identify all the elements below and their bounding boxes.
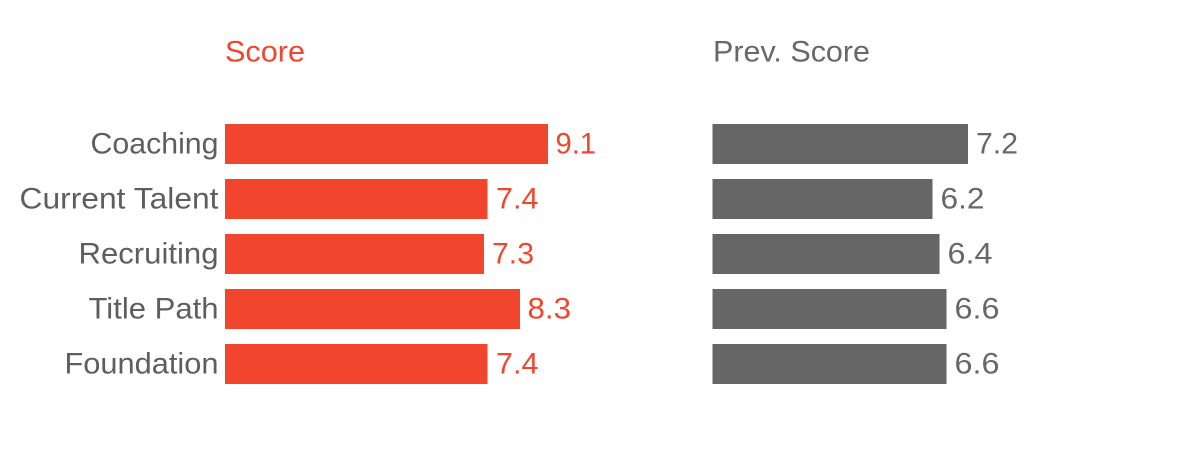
heading: Prev. Score: Prev. Score — [713, 36, 870, 68]
score values: 7.4 — [496, 348, 538, 380]
row labels: Recruiting — [78, 238, 218, 270]
previous score values: 6.6 — [954, 292, 1000, 326]
previous score values — [940, 128, 1018, 380]
score values: 7.4 — [496, 182, 538, 216]
score values: 9.1 — [556, 128, 596, 160]
previous score values: 7.2 — [976, 128, 1018, 160]
row labels — [20, 128, 219, 380]
row labels: Current Talent — [20, 182, 219, 216]
previous score values: 6.4 — [948, 238, 992, 270]
previous score bars — [712, 124, 968, 384]
score values: 7.3 — [492, 238, 534, 270]
score bars — [225, 124, 548, 384]
score values: 8.3 — [528, 292, 571, 326]
previous score values: 6.6 — [954, 348, 1000, 380]
score values — [492, 128, 596, 380]
previous score values: 6.2 — [940, 182, 984, 216]
heading: Score: Score — [225, 36, 305, 68]
row labels: Coaching — [90, 128, 218, 160]
row labels: Title Path — [88, 292, 218, 326]
row labels: Foundation — [64, 348, 218, 380]
